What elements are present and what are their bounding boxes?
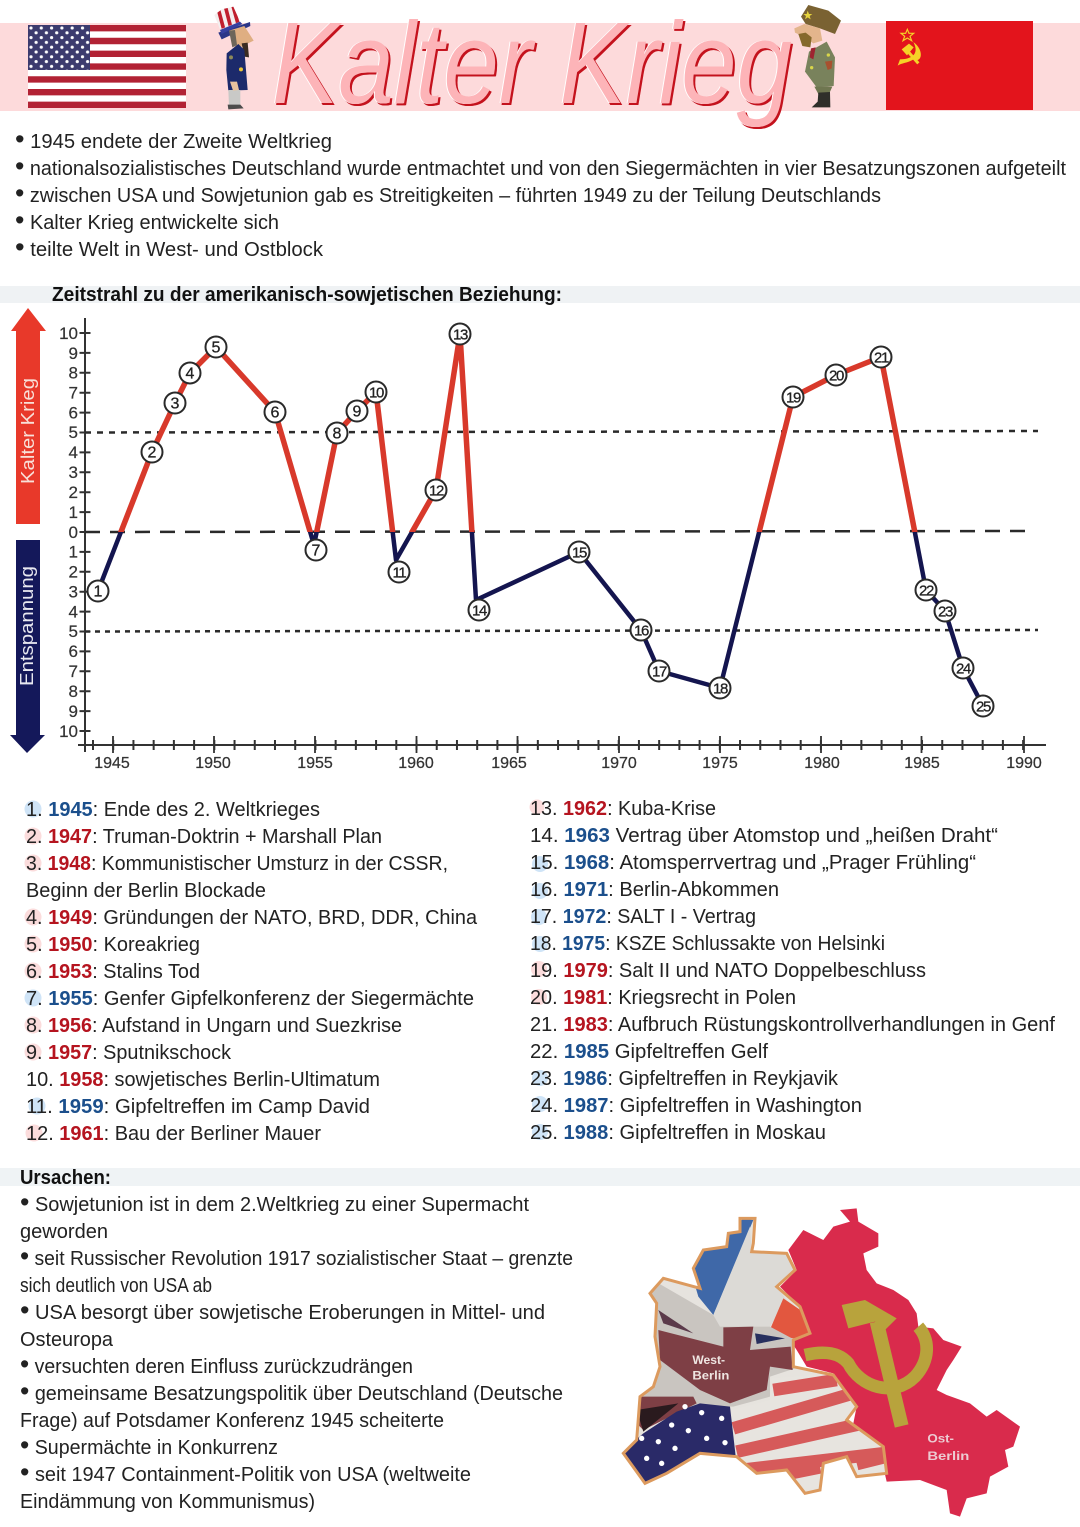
list: events 13 to 25: 21. 1983: Aufbruch Rüstungskontrollverhandlungen in Genf <box>530 1014 1055 1036</box>
y axis labels: 4 <box>69 443 78 462</box>
arrow: Kalter Krieg <box>11 308 46 524</box>
y axis labels: 2 <box>69 562 78 582</box>
numbered markers: 20 <box>829 368 844 384</box>
list: events 13 to 25: 13. 1962: Kuba-Krise <box>530 798 716 820</box>
x axis labels: 1980 <box>804 755 840 772</box>
numbered markers: 3 <box>171 396 180 412</box>
x axis labels: 1945 <box>94 755 130 772</box>
numbered markers: 18 <box>713 680 728 698</box>
list: events 13 to 25: 16. 1971: Berlin-Abkommen <box>530 879 779 901</box>
numbered markers: 2 <box>148 444 157 462</box>
icon: Soviet soldier <box>794 5 841 107</box>
x axis labels: 1955 <box>297 755 333 772</box>
icon: Uncle Sam <box>214 3 254 109</box>
text block: causes: Eindämmung von Kommunismus) <box>20 1491 315 1513</box>
list: events 1 to 12 <box>24 799 478 1145</box>
text block: causes: • USA besorgt über sowjetische Eroberungen in Mittel- und <box>20 1295 545 1325</box>
y axis labels: 3 <box>69 463 78 482</box>
data line: detente below zero <box>100 532 980 698</box>
heading: causes: Ursachen: <box>20 1167 111 1189</box>
icon: Soviet flag <box>886 21 1033 110</box>
numbered markers: 1 <box>94 584 103 600</box>
x axis labels <box>94 755 1042 772</box>
text block: introduction: • teilte Welt in West- und Ostblock <box>15 232 324 262</box>
text block: causes: • Supermächte in Konkurrenz <box>20 1430 278 1460</box>
x axis labels: 1965 <box>491 755 527 772</box>
numbered markers: 4 <box>186 366 195 382</box>
list: events 13 to 25: 15. 1968: Atomsperrvertrag und „Prager Frühling“ <box>530 852 976 874</box>
text block: causes: • versuchten deren Einfluss zurückzudrängen <box>20 1349 413 1379</box>
numbered markers <box>88 324 994 716</box>
numbered markers: 11 <box>393 564 406 582</box>
text block: causes: sich deutlich von USA ab <box>20 1275 212 1297</box>
title text: Kalter Krieg <box>272 0 792 128</box>
heading: causes <box>0 1167 1080 1189</box>
numbered markers: 17 <box>652 664 667 680</box>
numbered markers: 13 <box>453 326 468 344</box>
y axis labels: 9 <box>69 702 78 721</box>
numbered markers: 12 <box>429 482 444 500</box>
list: events 1 to 12: 9. 1957: Sputnikschock <box>26 1042 232 1064</box>
text block: introduction: • 1945 endete der Zweite Weltkrieg <box>15 124 332 154</box>
numbered markers: 7 <box>312 542 321 560</box>
map: divided Berlin <box>620 1208 1020 1517</box>
map region: East Berlin: Ost- <box>927 1432 954 1445</box>
x axis labels: 1985 <box>904 755 940 772</box>
x axis labels: 1950 <box>195 755 231 772</box>
numbered markers: 5 <box>212 340 221 356</box>
heading: timeline <box>0 284 1080 306</box>
numbered markers: 16 <box>634 622 649 640</box>
numbered markers: 23 <box>938 604 953 620</box>
x axis labels: 1975 <box>702 755 738 772</box>
list: events 13 to 25: 17. 1972: SALT I - Vertrag <box>530 906 756 928</box>
text block: introduction: • nationalsozialistisches Deutschland wurde entmachtet und von den Siegermächten in vier Besatzungszonen aufgeteilt <box>15 151 1066 181</box>
numbered markers: 10 <box>369 384 384 402</box>
x axis labels: 1960 <box>398 755 434 772</box>
numbered markers: 21 <box>874 350 889 366</box>
numbered markers: 19 <box>786 390 801 406</box>
numbered markers: 14 <box>472 602 487 620</box>
text block: introduction: • zwischen USA und Sowjetunion gab es Streitigkeiten – führten 1949 zu der Teilung Deutschlands <box>15 178 881 208</box>
y axis labels: 6 <box>69 404 78 422</box>
list: events 13 to 25: 18. 1975: KSZE Schlussakte von Helsinki <box>530 933 885 955</box>
list: events 1 to 12: 5. 1950: Koreakrieg <box>26 934 200 956</box>
y axis labels: 2 <box>69 483 78 502</box>
text block: causes: • seit 1947 Containment-Politik von USA (weltweite <box>20 1457 471 1487</box>
y axis labels: 10 <box>59 722 78 741</box>
y axis labels: 7 <box>69 662 78 681</box>
numbered markers: 22 <box>919 582 934 600</box>
list: events 1 to 12: 4. 1949: Gründungen der NATO, BRD, DDR, China <box>26 907 478 929</box>
x axis labels: 1990 <box>1006 755 1042 772</box>
y axis labels: 5 <box>69 423 78 442</box>
y axis labels: 7 <box>69 384 78 402</box>
arrow: Entspannung <box>10 540 45 753</box>
arrow: Entspannung: Entspannung <box>16 566 37 686</box>
text block: causes: • Sowjetunion ist in dem 2.Weltkrieg zu einer Supermacht <box>20 1187 529 1217</box>
list: events 13 to 25: 24. 1987: Gipfeltreffen in Washington <box>530 1095 862 1117</box>
map region: West Berlin: Berlin <box>692 1370 729 1383</box>
x axis labels: 1970 <box>601 755 637 772</box>
map region: West Berlin <box>620 1217 890 1497</box>
list: events 1 to 12: 10. 1958: sowjetisches Berlin-Ultimatum <box>26 1069 380 1091</box>
map region: East Berlin <box>780 1208 1020 1517</box>
y axis labels: 8 <box>69 682 78 701</box>
list: events 1 to 12: 11. 1959: Gipfeltreffen im Camp David <box>26 1096 370 1118</box>
y axis labels: 4 <box>69 602 78 622</box>
list: events 1 to 12: 3. 1948: Kommunistischer Umsturz in der CSSR, <box>26 853 448 875</box>
y axis labels: 9 <box>69 344 78 363</box>
list: events 13 to 25: 19. 1979: Salt II und NATO Doppelbeschluss <box>530 960 926 982</box>
numbered markers: 8 <box>333 426 342 442</box>
list: events 13 to 25 <box>530 798 1055 1144</box>
y axis labels <box>59 324 78 741</box>
y axis labels: 6 <box>69 642 78 661</box>
reference lines <box>85 431 1038 632</box>
text block: causes: • seit Russischer Revolution 1917 sozialistischer Staat – grenzte <box>20 1241 573 1271</box>
text block: causes: Osteuropa <box>20 1329 114 1351</box>
text block: causes <box>20 1187 573 1513</box>
text block: causes: geworden <box>20 1221 108 1243</box>
numbered markers: 6 <box>271 404 280 422</box>
list: events 1 to 12: 2. 1947: Truman-Doktrin + Marshall Plan <box>26 826 382 848</box>
numbered markers: 9 <box>353 404 362 420</box>
list: events 1 to 12: 7. 1955: Genfer Gipfelkonferenz der Siegermächte <box>26 988 474 1010</box>
y axis labels: 0 <box>69 523 78 542</box>
list: events 13 to 25: 22. 1985 Gipfeltreffen Gelf <box>530 1041 768 1063</box>
list: events 13 to 25: 20. 1981: Kriegsrecht in Polen <box>530 987 796 1009</box>
list: events 1 to 12: Beginn der Berlin Blockade <box>26 880 266 902</box>
y axis labels: 8 <box>69 364 78 382</box>
list: events 1 to 12: 1. 1945: Ende des 2. Weltkrieges <box>26 799 320 821</box>
text block: introduction: • Kalter Krieg entwickelte sich <box>15 205 279 235</box>
text block: causes: Frage) auf Potsdamer Konferenz 1945 scheiterte <box>20 1410 444 1432</box>
y axis labels: 5 <box>69 622 78 641</box>
numbered markers: 25 <box>976 698 991 716</box>
title banner <box>0 0 1080 128</box>
numbered markers: 15 <box>572 544 587 562</box>
map region: West Berlin: West- <box>692 1354 725 1367</box>
text block: causes: • gemeinsame Besatzungspolitik über Deutschland (Deutsche <box>20 1376 563 1406</box>
chart axes <box>78 318 1046 753</box>
y axis labels: 3 <box>69 582 78 602</box>
arrow: Kalter Krieg: Kalter Krieg <box>17 378 38 484</box>
numbered markers: 24 <box>956 660 971 678</box>
y axis labels: 10 <box>59 324 78 343</box>
icon: US flag <box>28 25 186 108</box>
line chart: timeline <box>59 318 1046 772</box>
text block: introduction <box>15 124 1066 262</box>
map region: East Berlin: Berlin <box>927 1450 969 1463</box>
list: events 1 to 12: 8. 1956: Aufstand in Ungarn und Suezkrise <box>26 1015 402 1037</box>
list: events 1 to 12: 6. 1953: Stalins Tod <box>26 961 200 983</box>
y axis labels: 1 <box>69 503 78 522</box>
list: events 13 to 25: 23. 1986: Gipfeltreffen in Reykjavik <box>530 1068 839 1090</box>
list: events 1 to 12: 12. 1961: Bau der Berliner Mauer <box>26 1123 321 1145</box>
data line: tension above zero <box>118 344 918 532</box>
list: events 13 to 25: 25. 1988: Gipfeltreffen in Moskau <box>530 1122 826 1144</box>
y axis labels: 1 <box>69 542 78 562</box>
heading: timeline: Zeitstrahl zu der amerikanisch-sowjetischen Beziehung: <box>52 284 562 306</box>
list: events 13 to 25: 14. 1963 Vertrag über Atomstop und „heißen Draht“ <box>530 825 998 847</box>
